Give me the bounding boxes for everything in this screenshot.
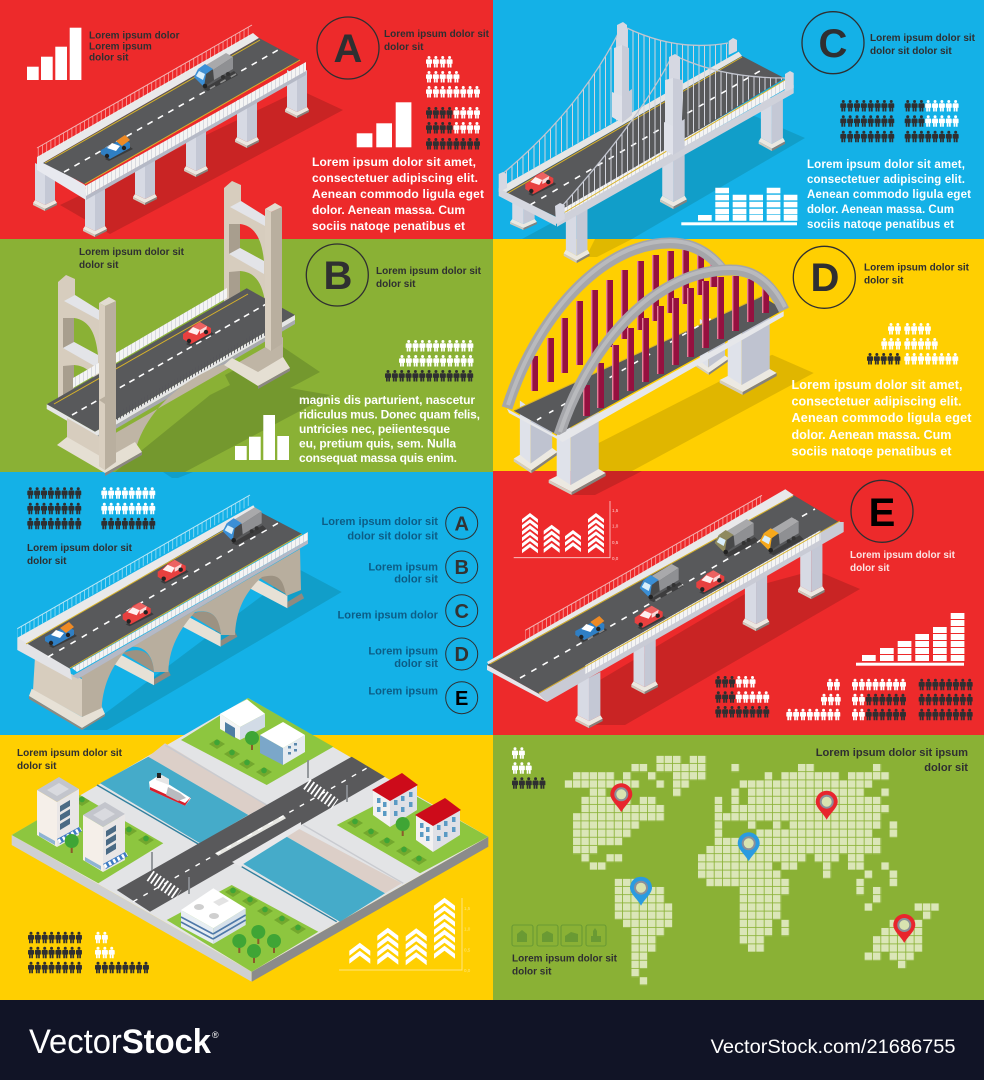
houses (372, 773, 461, 852)
paragraph B: eu, pretium quis, sem. Nulla (299, 436, 456, 450)
panel: yellow D (493, 239, 984, 471)
bridge D: arch (507, 241, 814, 495)
people B (385, 340, 474, 382)
legend A to E: Lorem ipsum dolor sit (322, 516, 438, 528)
legend A to E: dolor sit dolor sit (347, 530, 438, 542)
text: A label: dolor sit (384, 42, 424, 53)
legend A to E: dolor sit (394, 574, 438, 586)
text: A label: Lorem ipsum dolor sit (384, 29, 490, 40)
top buildings (220, 699, 305, 765)
footer logo: VectorStock (29, 1023, 211, 1061)
front arch columns (583, 276, 769, 416)
text: D label: Lorem ipsum dolor sit (864, 262, 970, 274)
ship (149, 773, 191, 806)
paragraph A (312, 155, 484, 233)
paragraph C: sociis natoqe penatibus et (807, 219, 954, 231)
panel: green world map (493, 735, 984, 1000)
legend A to E: Lorem ipsum (368, 646, 438, 658)
chevron chart city: 0,5 (464, 948, 471, 952)
left towers (37, 777, 128, 872)
text: map bottom left: Lorem ipsum dolor sit (512, 953, 618, 964)
text: map bottom left: dolor sit (512, 966, 552, 977)
bar chart B (235, 415, 289, 460)
legend A to E: A (454, 514, 469, 536)
badge D: D (811, 256, 839, 300)
paragraph B: consequat massa quis enim. (299, 451, 457, 465)
badge C (802, 12, 864, 74)
paragraph C: dolor. Aenean massa. Cum (807, 204, 954, 216)
badge E (851, 480, 913, 542)
chevron chart city: 1,0 (464, 926, 471, 932)
chevron chart E: 1,0 (612, 524, 619, 528)
text: D label: dolor sit (864, 275, 904, 286)
chevron chart E (514, 501, 619, 561)
river (97, 743, 403, 922)
people A (426, 56, 480, 150)
panel: green B (0, 239, 493, 472)
text: blue panel label: dolor sit (27, 556, 67, 567)
legend A to E: E (455, 688, 468, 710)
legend A to E: Lorem ipsum (368, 561, 438, 573)
text: B label: dolor sit (376, 279, 416, 290)
icons: buildings (512, 925, 606, 946)
map pins (610, 783, 915, 943)
badge C: C (819, 22, 847, 66)
paragraph C (807, 159, 971, 231)
back arch columns (531, 250, 717, 391)
text: B top: dolor sit (79, 260, 119, 271)
text: city label: Lorem ipsum dolor sit (17, 748, 123, 759)
footer band (0, 1000, 984, 1080)
legend A to E: D (454, 644, 469, 666)
people D (867, 323, 958, 364)
stepped bar chart E (856, 613, 964, 666)
chevron chart E: 0,0 (612, 556, 619, 561)
chevron chart E: 0,5 (612, 540, 619, 545)
bridge B: stone towers (47, 181, 330, 478)
badge A: A (334, 27, 362, 71)
footer registered mark: ® (212, 1030, 219, 1040)
text: city label: dolor sit (17, 761, 57, 772)
people: map (512, 747, 545, 789)
legend A to E: Lorem ipsum dolor (338, 610, 439, 622)
text: B label: Lorem ipsum dolor sit (376, 266, 482, 277)
people: blue panel (27, 487, 155, 529)
text: E label: dolor sit (850, 563, 890, 574)
badge A (317, 17, 379, 79)
bar chart A left (27, 28, 81, 80)
paragraph D: consectetuer adipiscing elit. (792, 394, 962, 408)
panel: red A (0, 0, 493, 239)
paragraph D: Aenean commodo ligula eget (792, 411, 972, 425)
tower C front (499, 54, 794, 224)
legend A to E (322, 507, 478, 714)
people E (715, 676, 973, 720)
equalizer chart C (681, 188, 797, 225)
paragraph D: dolor. Aenean massa. Cum (792, 428, 952, 442)
paragraph D (792, 378, 972, 458)
paragraph D: sociis natoqe penatibus et (792, 444, 952, 458)
paragraph B: ridiculus mus. Donec quam felis, (299, 408, 480, 422)
legend A to E: Lorem ipsum (368, 685, 438, 697)
bridge: stone arches (17, 495, 342, 730)
paragraph D: Lorem ipsum dolor sit amet, (792, 378, 962, 392)
text: A top left: Lorem ipsum dolor (89, 30, 180, 42)
badge B: B (324, 254, 352, 298)
trees (65, 731, 410, 963)
legend A to E: C (454, 601, 469, 623)
pixel world map (565, 756, 940, 985)
shrubs (74, 739, 427, 934)
tower C back (612, 22, 737, 123)
bottom office (181, 888, 246, 944)
legend A to E: dolor sit (394, 658, 438, 670)
paragraph C: consectetuer adipiscing elit. (807, 174, 965, 186)
chevron chart E: 1,5 (612, 508, 619, 513)
people: city (28, 932, 149, 973)
paragraph A: dolor. Aenean massa. Cum (312, 203, 465, 217)
bar chart A right (357, 102, 411, 147)
text: map top right: Lorem ipsum dolor sit ipsum (816, 747, 968, 759)
chevron chart city: 1,5 (464, 906, 471, 911)
paragraph A: Aenean commodo ligula eget (312, 187, 484, 201)
panel: yellow city (0, 735, 493, 1000)
paragraph B: magnis dis parturient, nascetur (299, 393, 475, 407)
badge E: E (869, 491, 895, 535)
text: map top right: dolor sit (924, 762, 968, 774)
people C (840, 100, 959, 142)
chevron chart city: 0,0 (464, 968, 471, 973)
text: blue panel label: Lorem ipsum dolor sit (27, 543, 133, 554)
paragraph A: consectetuer adipiscing elit. (312, 171, 478, 185)
traffic lights (152, 760, 347, 894)
text: C label: Lorem ipsum dolor sit (870, 33, 976, 44)
paragraph A: Lorem ipsum dolor sit amet, (312, 155, 476, 169)
text: A top left: dolor sit (89, 52, 129, 64)
paragraph B (299, 393, 480, 465)
badge B (306, 244, 368, 306)
panel: red E (493, 471, 984, 735)
bridge E: long viaduct (487, 489, 860, 728)
bridge A: beam viaduct (33, 25, 343, 237)
bridge C: suspension (499, 22, 805, 263)
text: C label: dolor sit dolor sit (870, 46, 952, 57)
lots (12, 698, 488, 972)
text: B top: Lorem ipsum dolor sit (79, 247, 185, 258)
isometric city with river and bridge (12, 698, 488, 982)
paragraph C: Lorem ipsum dolor sit amet, (807, 159, 965, 171)
panel: blue C (493, 0, 984, 239)
text: A top left: Lorem ipsum (89, 42, 152, 52)
paragraph B: untricies nec, peiientesque (299, 422, 450, 436)
badge D (793, 246, 855, 308)
paragraph C: Aenean commodo ligula eget (807, 189, 971, 201)
arch pier walls (113, 650, 171, 685)
paragraph A: sociis natoqe penatibus et (312, 219, 465, 233)
panel: blue bridges list (0, 472, 493, 735)
legend A to E: B (454, 557, 469, 579)
footer url: VectorStock.com/21686755 (711, 1036, 956, 1058)
road (117, 757, 385, 912)
chevron chart city (339, 898, 471, 973)
text: E label: Lorem ipsum dolor sit (850, 550, 956, 561)
